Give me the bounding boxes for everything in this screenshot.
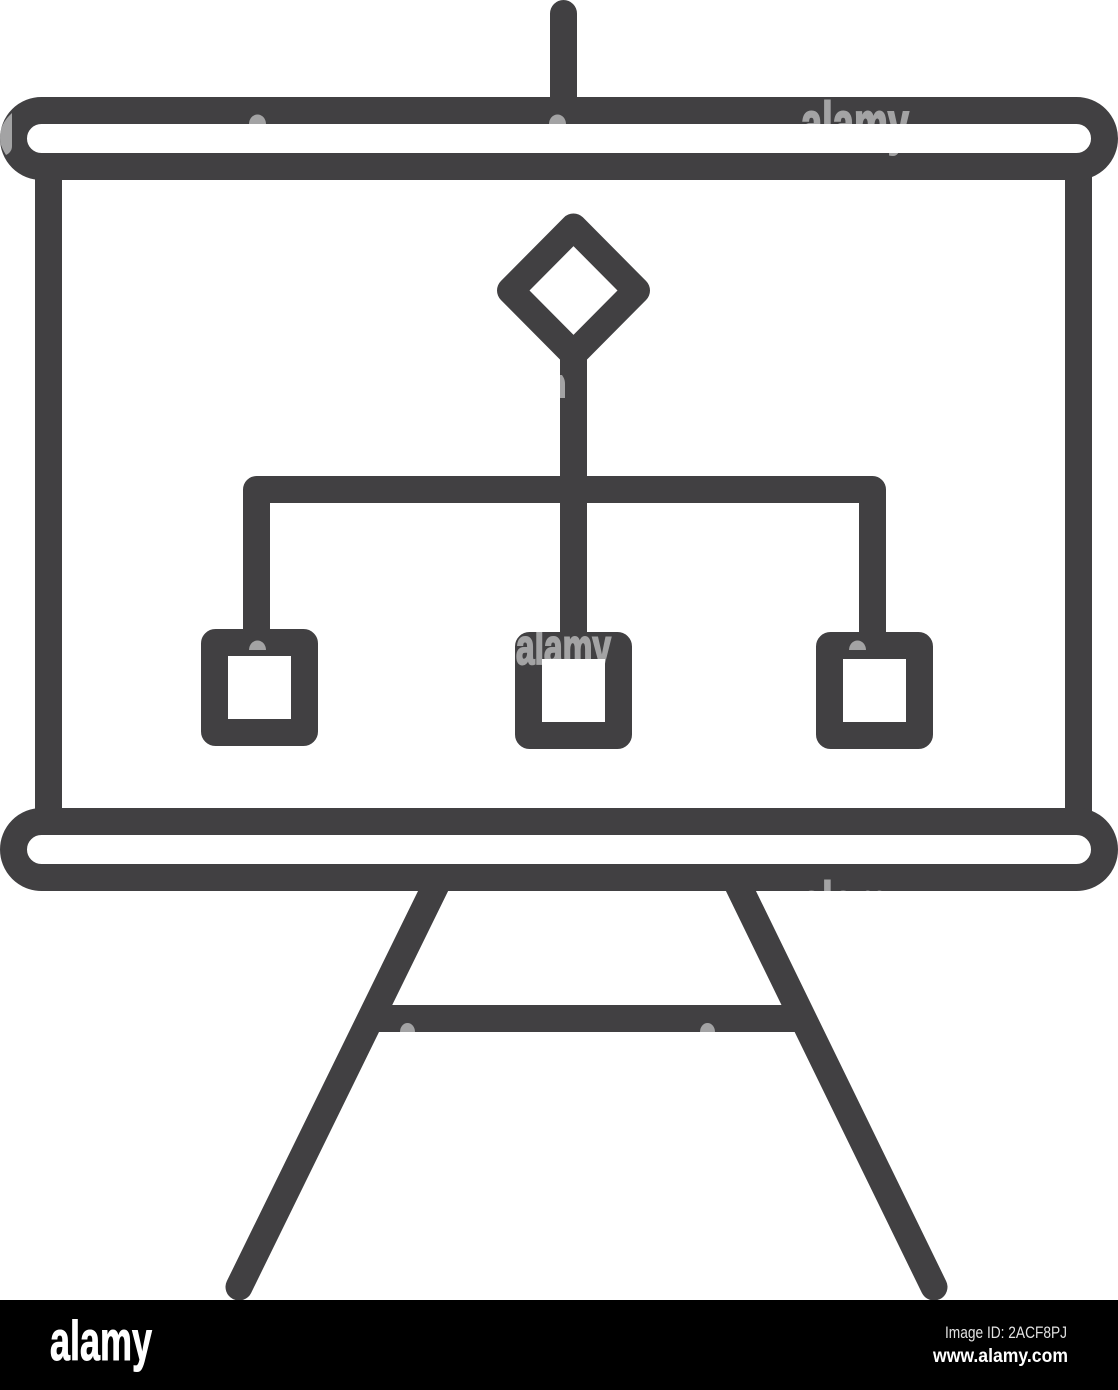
footer logo: alamy <box>50 1309 152 1372</box>
watermark fragments: alamy <box>516 619 611 675</box>
hanging pole <box>550 14 577 105</box>
branch connector <box>256 490 872 640</box>
easel left leg <box>239 885 436 1287</box>
watermark fragments: alamy <box>801 91 909 156</box>
image id: Image ID: 2ACF8PJ <box>945 1323 1067 1342</box>
middle node <box>528 646 618 736</box>
easel right leg <box>738 885 934 1287</box>
left node <box>214 642 304 732</box>
website: www.alamy.com <box>932 1346 1068 1367</box>
bottom roller <box>14 822 1104 878</box>
flowchart diagram <box>214 227 920 736</box>
watermark fragments <box>516 91 909 936</box>
footer bar <box>0 1300 1118 1390</box>
right node <box>830 646 920 736</box>
watermark specks <box>0 113 866 1032</box>
main connector <box>560 354 587 640</box>
screen left edge <box>35 170 62 815</box>
screen right edge <box>1065 170 1092 815</box>
easel crossbar <box>372 1005 800 1032</box>
watermark fragments: alamy <box>801 871 909 936</box>
decision diamond <box>510 227 636 354</box>
top roller <box>14 110 1104 166</box>
